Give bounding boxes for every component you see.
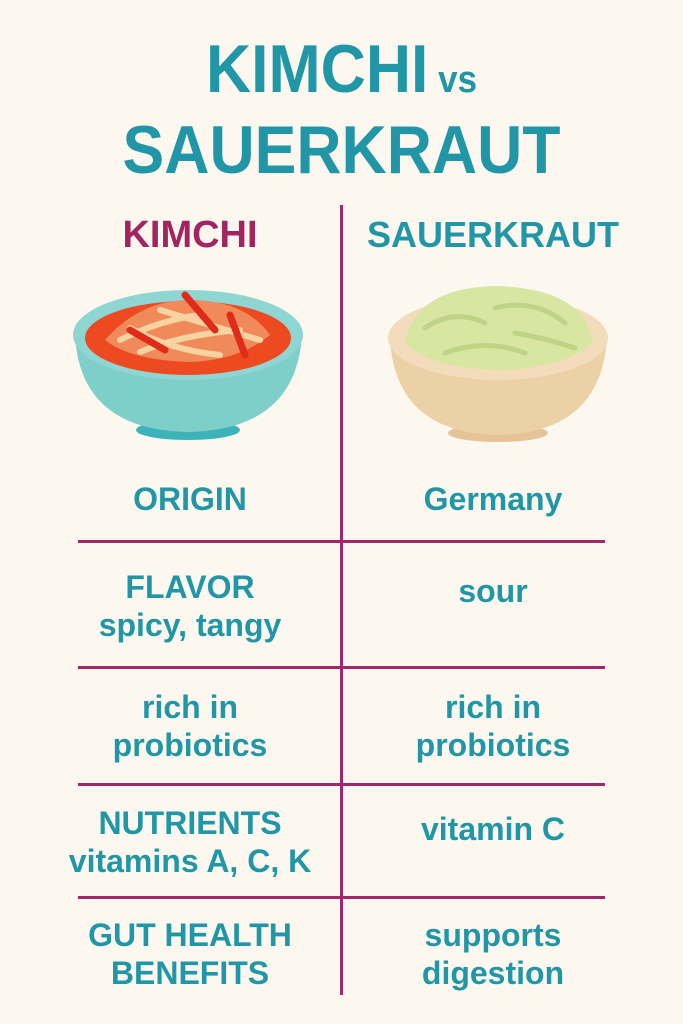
row 1: origin	[133, 481, 562, 517]
text: digestion	[422, 955, 564, 991]
text: sour	[458, 573, 528, 609]
text: GUT HEALTH	[88, 917, 292, 953]
text: BENEFITS	[111, 955, 269, 991]
icon: sauerkraut bowl	[388, 286, 608, 442]
text: probiotics	[113, 727, 267, 763]
heading: sauerkraut: SAUERKRAUT	[367, 214, 619, 255]
text: ORIGIN	[133, 481, 247, 517]
title: SAUERKRAUT	[123, 112, 560, 188]
text: probiotics	[416, 727, 570, 763]
text: NUTRIENTS	[98, 805, 282, 841]
text: vitamin C	[421, 811, 565, 847]
row 3: probiotics	[113, 689, 570, 763]
text: rich in	[142, 689, 238, 725]
row 5: gut health	[88, 917, 564, 991]
text: FLAVOR	[125, 569, 255, 605]
text: Germany	[424, 481, 562, 517]
text: rich in	[445, 689, 541, 725]
row 2: flavor	[99, 569, 528, 643]
text: spicy, tangy	[99, 607, 281, 643]
text: supports	[425, 917, 561, 953]
text: vitamins A, C, K	[69, 843, 311, 879]
vertical divider	[340, 205, 343, 995]
heading: kimchi: KIMCHI	[122, 214, 258, 256]
title	[123, 31, 560, 188]
icon: kimchi bowl	[73, 290, 303, 440]
row 4: nutrients	[68, 805, 565, 879]
title: KIMCHI vs	[206, 31, 477, 107]
